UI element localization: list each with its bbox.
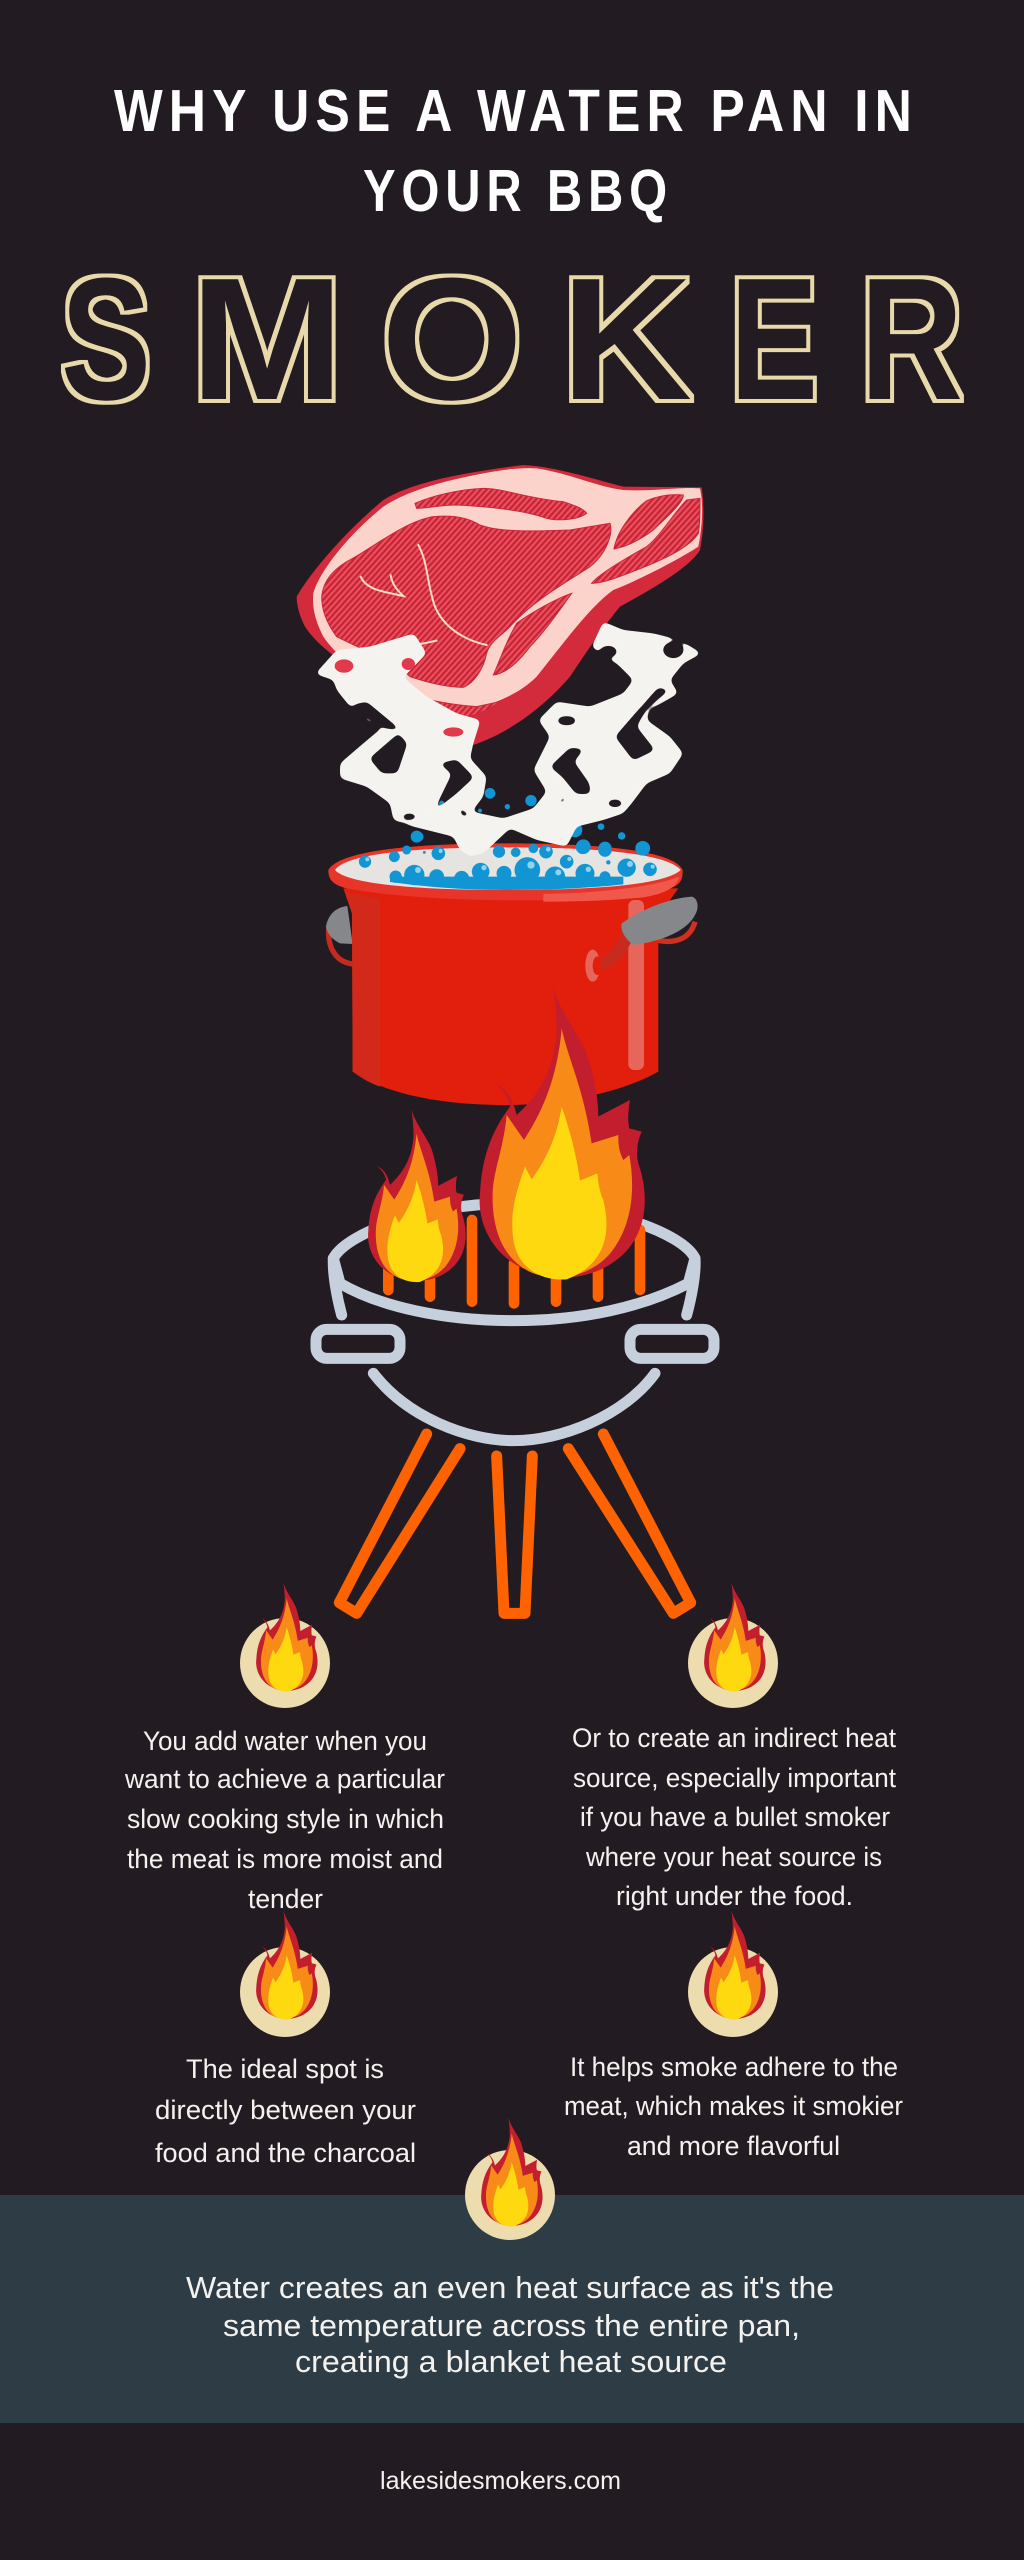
- steak muscle bottom: [387, 685, 500, 717]
- medallion 3: [240, 1910, 330, 2037]
- pot lug: [585, 932, 628, 982]
- text block 1: want to achieve a particular: [124, 1764, 445, 1794]
- grill centre leg: [497, 1456, 532, 1613]
- steak muscle upper: [415, 488, 587, 520]
- title: [114, 78, 918, 224]
- medallion 5: [465, 2117, 555, 2240]
- left grill handle: [316, 1329, 400, 1358]
- grill rim: [333, 1203, 695, 1321]
- text block 3: [155, 2054, 416, 2168]
- sinew: [361, 545, 487, 647]
- text block 3: directly between your: [155, 2095, 416, 2125]
- steak muscle lower: [493, 593, 572, 675]
- medallion 2: [688, 1582, 778, 1708]
- icon: large flame: [480, 985, 645, 1280]
- icon: bubbles rising from the water: [411, 788, 650, 856]
- icon: steam: [315, 622, 702, 857]
- text block 3: food and the charcoal: [155, 2138, 416, 2168]
- text block 2: where your heat source is: [585, 1842, 882, 1872]
- text block 1: tender: [248, 1884, 323, 1914]
- text block 1: You add water when you: [143, 1726, 427, 1756]
- callout text: creating a blanket heat source: [295, 2344, 727, 2379]
- icon: red pot of boiling water: [326, 823, 698, 1105]
- callout text: [186, 2270, 834, 2379]
- steak fat: [313, 468, 702, 710]
- callout text: same temperature across the entire pan,: [223, 2308, 800, 2343]
- water surface: [335, 847, 681, 890]
- icon: raw steak: [297, 465, 703, 745]
- meat seen through steam: [335, 658, 463, 737]
- text block 2: if you have a bullet smoker: [580, 1802, 890, 1832]
- pot highlight: [628, 900, 644, 1070]
- steak muscle right: [614, 495, 683, 549]
- steak muscle main: [322, 516, 611, 687]
- bubbles in pot: [359, 823, 657, 887]
- pot right handle: [621, 897, 698, 945]
- heading: SMOKER outline: S: [61, 241, 151, 436]
- icon: small flame: [368, 1108, 466, 1282]
- medallion 1: [240, 1582, 330, 1708]
- pot body: [343, 888, 678, 1105]
- grill bars: [388, 1220, 640, 1303]
- text block 2: right under the food.: [616, 1881, 853, 1911]
- grill bowl: [373, 1373, 655, 1441]
- heading: SMOKER outline: O: [381, 241, 523, 436]
- steak side: [297, 465, 703, 745]
- pot rim: [328, 843, 683, 900]
- heading: SMOKER outline: R: [860, 241, 963, 436]
- icon: grill: [316, 1203, 714, 1613]
- steam plumes: [315, 622, 702, 857]
- text block 2: Or to create an indirect heat: [572, 1723, 896, 1753]
- pot handle strap right: [657, 922, 695, 941]
- text block 2: source, especially important: [573, 1763, 896, 1793]
- heading: SMOKER outline: M: [190, 241, 344, 436]
- text block 4: [564, 2052, 903, 2161]
- grill right leg: [568, 1434, 691, 1613]
- bubble highlights: [365, 843, 655, 875]
- text block 1: [124, 1726, 445, 1914]
- pot left handle: [326, 906, 353, 964]
- footer url: lakesidesmokers.com: [380, 2467, 621, 2495]
- grill left leg: [339, 1434, 460, 1613]
- text block 1: the meat is more moist and: [127, 1844, 443, 1874]
- heading: SMOKER outline: [61, 241, 963, 436]
- text block 4: and more flavorful: [627, 2131, 840, 2161]
- callout text: Water creates an even heat surface as it's the: [186, 2270, 834, 2305]
- medallion 4: [688, 1910, 778, 2037]
- text block 2: [572, 1723, 896, 1911]
- right grill handle: [630, 1329, 714, 1358]
- text block 4: It helps smoke adhere to the: [570, 2052, 898, 2082]
- pot shading: [345, 892, 380, 1087]
- title line 2: YOUR BBQ: [363, 158, 673, 224]
- text block 4: meat, which makes it smokier: [564, 2091, 903, 2121]
- panel: bottom band: [0, 2195, 1024, 2423]
- title line 1: WHY USE A WATER PAN IN: [114, 78, 918, 144]
- heading: SMOKER outline: K: [561, 241, 692, 436]
- steak muscle far right: [592, 498, 700, 583]
- text block 3: The ideal spot is: [186, 2054, 384, 2084]
- grill sides: [333, 1258, 695, 1315]
- text block 1: slow cooking style in which: [127, 1804, 444, 1834]
- heading: SMOKER outline: E: [730, 241, 818, 436]
